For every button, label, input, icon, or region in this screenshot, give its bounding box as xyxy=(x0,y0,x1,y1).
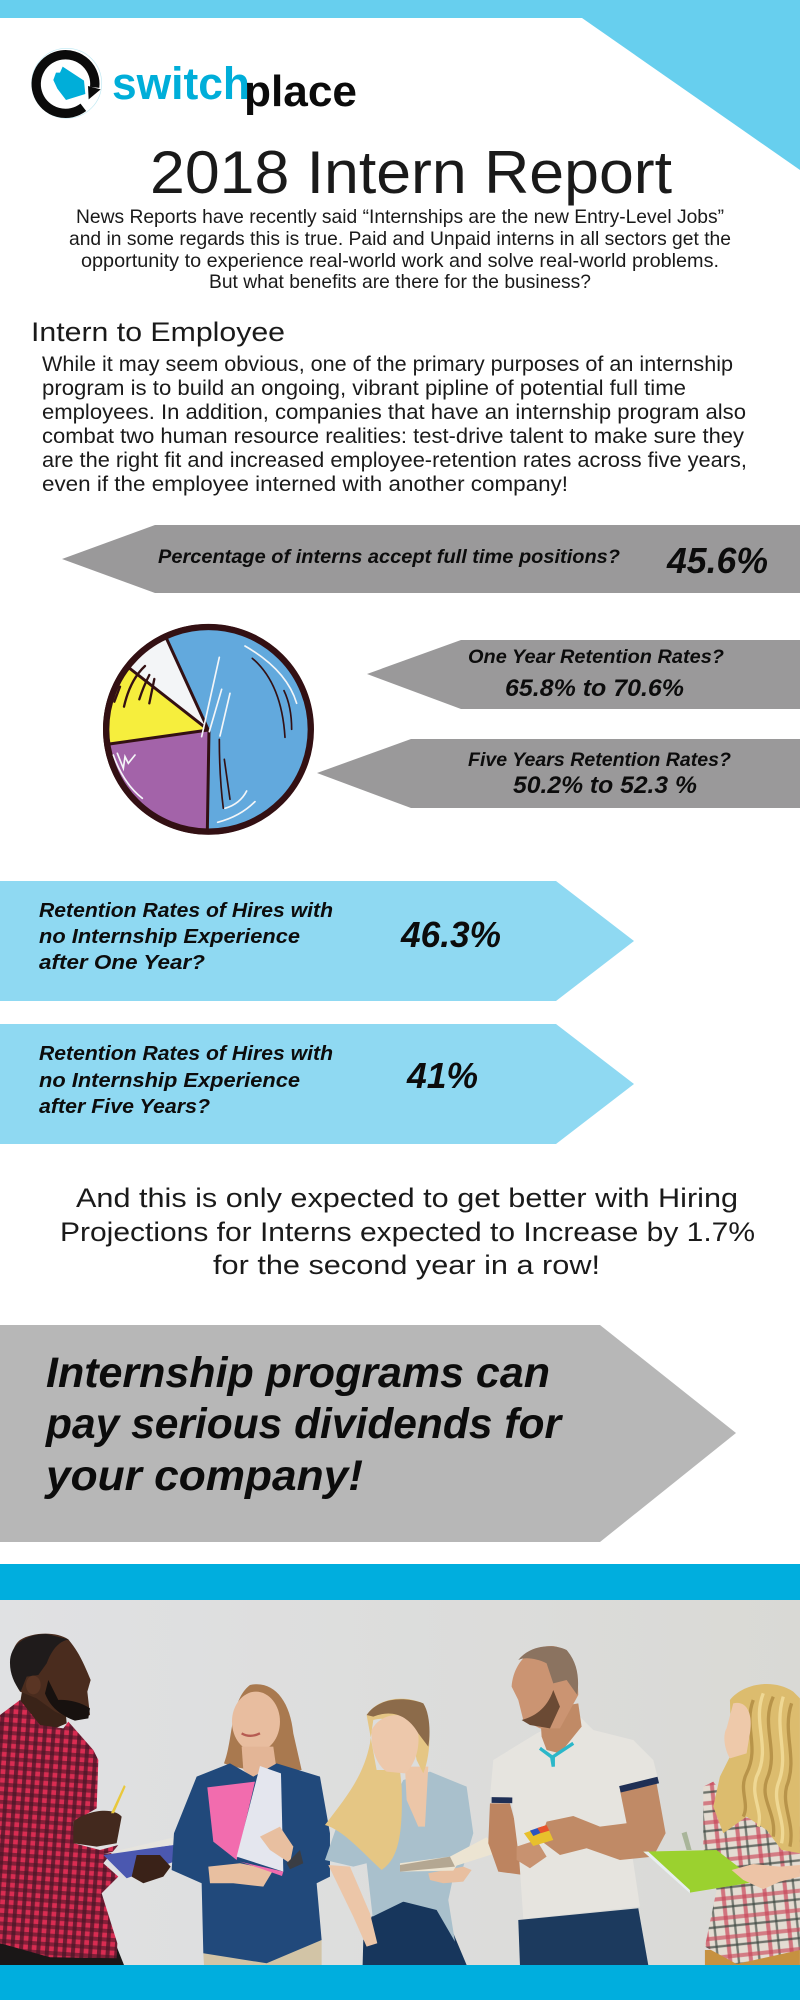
arrow: no internship after five years: after Five Years? xyxy=(39,1095,210,1118)
arrow: no internship after one year: after One Year? xyxy=(39,951,206,974)
body paragraph xyxy=(42,352,747,496)
intro paragraph xyxy=(69,206,731,293)
body paragraph: are the right fit and increased employee-retention rates across five years, xyxy=(42,448,747,472)
conclusion arrow: your company! xyxy=(44,1452,363,1500)
arrow: no internship after one year: 46.3% xyxy=(400,914,501,955)
blue band below photo xyxy=(0,1965,800,2000)
hiring projections text: And this is only expected to get better with Hiring xyxy=(76,1183,738,1213)
body paragraph: program is to build an ongoing, vibrant pipline of potential full time xyxy=(42,376,686,400)
body paragraph: While it may seem obvious, one of the primary purposes of an internship xyxy=(42,352,733,376)
person: man in red check shirt xyxy=(0,1634,184,1965)
heading: Intern to Employee: Intern to Employee xyxy=(31,317,285,347)
callout: five years retention xyxy=(317,739,800,808)
slice: blue xyxy=(166,627,313,830)
conclusion arrow: pay serious dividends for xyxy=(45,1400,563,1448)
callout: five years retention: 50.2% to 52.3 % xyxy=(513,772,697,799)
intro paragraph: But what benefits are there for the business? xyxy=(209,271,591,293)
callout: accept full time positions xyxy=(62,525,800,593)
header band xyxy=(0,0,800,170)
blue band above photo xyxy=(0,1564,800,1600)
person: woman in denim shirt with pink folder xyxy=(172,1684,330,1965)
arrow: no internship after five years: 41% xyxy=(406,1055,478,1096)
arrow: no internship after five years: Retention Rates of Hires with xyxy=(39,1042,333,1065)
person: man in white polo xyxy=(488,1646,666,1965)
body paragraph: even if the employee interned with another company! xyxy=(42,472,568,496)
body paragraph: employees. In addition, companies that have an internship program also xyxy=(42,400,746,424)
logo: switchplace xyxy=(32,48,357,118)
callout: one year retention: One Year Retention Rates? xyxy=(468,646,724,668)
logo word: place: place xyxy=(244,67,357,116)
arrow: no internship after five years: no Internship Experience xyxy=(39,1069,300,1092)
callout: accept full time positions: 45.6% xyxy=(666,540,768,581)
hiring projections text: Projections for Interns expected to Increase by 1.7% xyxy=(60,1217,755,1247)
intro paragraph: News Reports have recently said “Internships are the new Entry-Level Jobs” xyxy=(76,206,724,228)
slice: yellow xyxy=(108,666,208,744)
arrow: no internship after one year xyxy=(0,881,634,1001)
intro paragraph: opportunity to experience real-world work and solve real-world problems. xyxy=(81,250,719,272)
icon: ring with house xyxy=(32,48,102,118)
callout: accept full time positions: Percentage of interns accept full time positions? xyxy=(158,546,620,568)
person: curly blonde woman with green folder xyxy=(643,1684,800,1965)
callout: one year retention: 65.8% to 70.6% xyxy=(505,675,684,702)
arrow: no internship after one year: Retention Rates of Hires with xyxy=(39,899,333,922)
callout: one year retention xyxy=(367,640,800,709)
pie chart illustration xyxy=(103,624,314,835)
slice: white xyxy=(127,637,208,730)
slice: purple xyxy=(109,730,208,830)
intro paragraph: and in some regards this is true. Paid and Unpaid interns in all sectors get the xyxy=(69,228,731,250)
logo word: switch: switch xyxy=(112,58,250,109)
body paragraph: combat two human resource realities: test-drive talent to make sure they xyxy=(42,424,744,448)
conclusion arrow: Internship programs can xyxy=(46,1349,550,1397)
icon: rubik cube xyxy=(524,1825,553,1846)
photo: group of interns xyxy=(0,1600,800,1965)
person: blonde woman in light denim shirt xyxy=(325,1699,501,1965)
arrow: no internship after one year: no Internship Experience xyxy=(39,925,300,948)
arrow: no internship after five years xyxy=(0,1024,634,1144)
hiring projections text xyxy=(60,1183,755,1280)
conclusion arrow xyxy=(0,1325,736,1542)
callout: five years retention: Five Years Retention Rates? xyxy=(468,749,731,771)
title: 2018 Intern Report xyxy=(150,139,672,206)
hiring projections text: for the second year in a row! xyxy=(213,1250,600,1280)
